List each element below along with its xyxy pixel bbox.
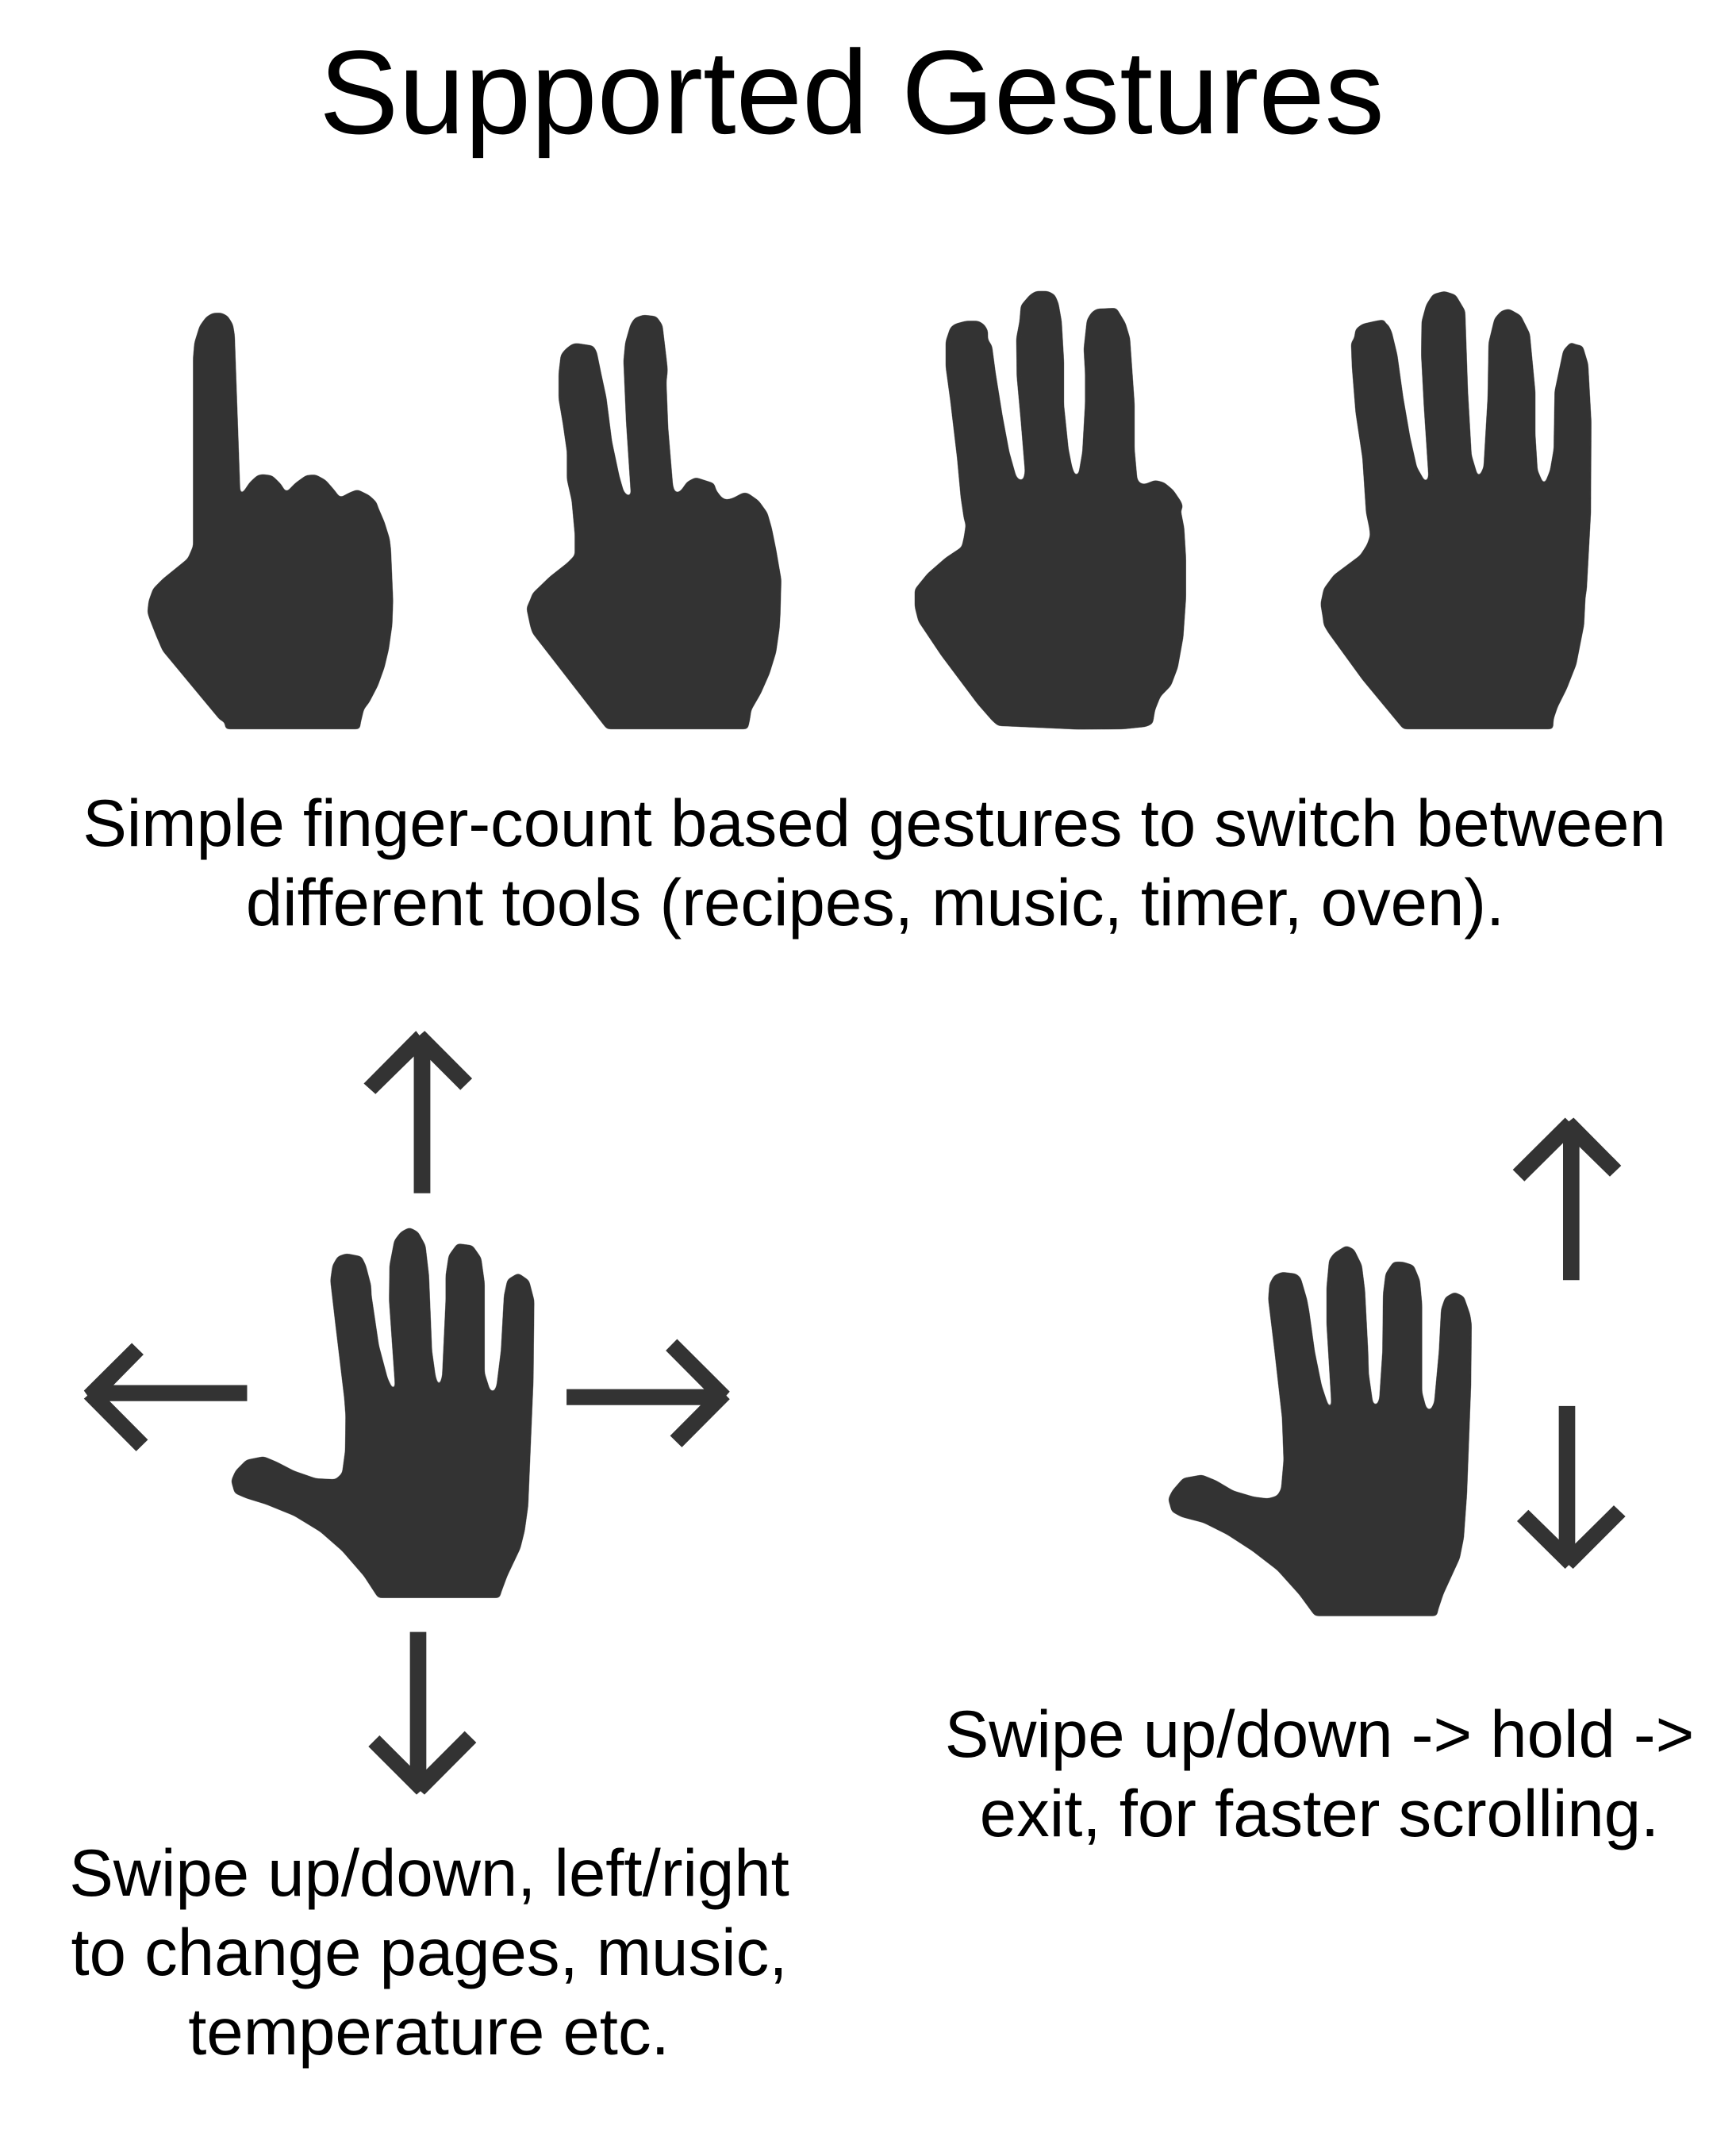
arrow: up <box>363 1031 472 1193</box>
icon: open hand small <box>1168 1246 1472 1616</box>
text: finger-count description: different tools (recipes, music, timer, oven). <box>246 866 1504 940</box>
text: finger-count description: Simple finger-count based gestures to switch between <box>83 786 1666 860</box>
icon: hand showing one finger <box>148 313 394 729</box>
text: four-way swipe description <box>69 1836 789 2069</box>
arrow: right <box>567 1339 730 1447</box>
panel: finger-count gestures <box>148 291 1592 729</box>
arrow: left <box>84 1343 247 1451</box>
text: finger-count description <box>83 786 1666 940</box>
text: fast-scroll description: Swipe up/down -> hold -> <box>945 1697 1694 1771</box>
text: fast-scroll description <box>945 1697 1694 1850</box>
icon: open hand <box>231 1228 534 1598</box>
icon: hand showing two fingers <box>526 315 782 729</box>
text: four-way swipe description: to change pages, music, <box>71 1916 787 1989</box>
arrow: down <box>368 1632 476 1795</box>
text: four-way swipe description: Swipe up/down, left/right <box>69 1836 789 1910</box>
text: four-way swipe description: temperature etc. <box>188 1995 670 2069</box>
icon: hand showing three fingers <box>915 291 1186 729</box>
title: Supported Gestures <box>319 25 1385 159</box>
arrow: scroll up <box>1513 1117 1621 1280</box>
icon: hand showing four fingers <box>1320 291 1592 729</box>
panel: four-way swipe gesture <box>84 1031 730 1795</box>
panel: fast-scroll gesture <box>1168 1117 1626 1616</box>
arrow: scroll down <box>1517 1406 1626 1569</box>
text: fast-scroll description: exit, for faster scrolling. <box>980 1777 1659 1850</box>
